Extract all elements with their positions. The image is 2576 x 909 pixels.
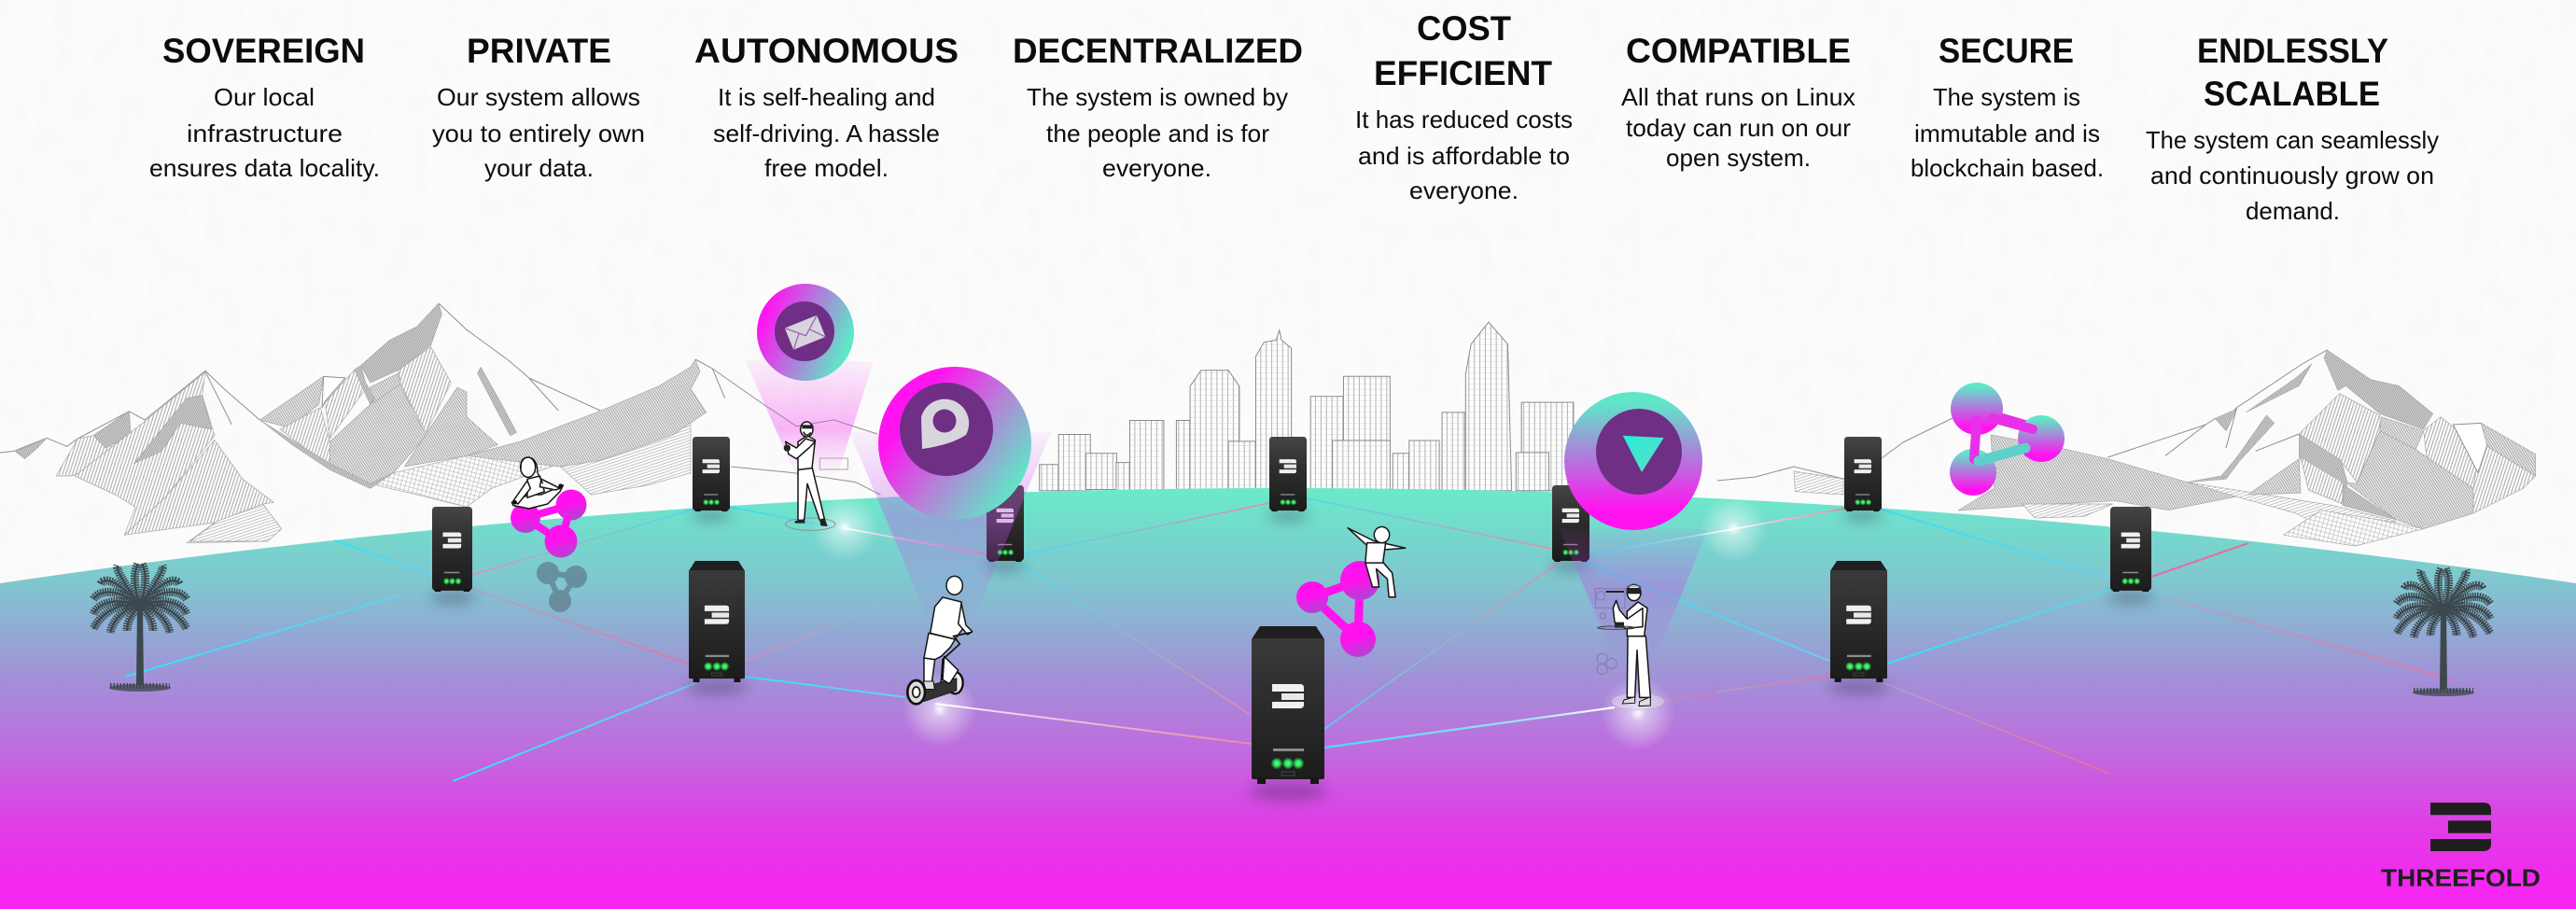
heading column: Endlessly Scalable (2146, 31, 2439, 225)
server node G (1552, 485, 1589, 562)
server shadows (430, 509, 2153, 802)
molecule shadow left (537, 562, 587, 612)
server node H (1844, 437, 1882, 511)
heading column: Compatible: COMPATIBLE (1626, 31, 1851, 70)
heading column: Endlessly Scalable: and continuously grow on (2150, 161, 2434, 189)
server node E (1269, 437, 1307, 511)
heading column: Secure: blockchain based. (1911, 154, 2104, 182)
heading column: Private: Our system allows (437, 83, 640, 111)
server node A (432, 507, 472, 592)
heading column: Secure: immutable and is (1914, 119, 2100, 147)
heading column: Decentralized: everyone. (1102, 154, 1211, 182)
callout: mail icon (757, 284, 854, 381)
heading column: Compatible: today can run on our (1626, 114, 1851, 142)
server node J (2110, 507, 2151, 592)
heading column: Compatible (1621, 31, 1855, 172)
city skyline (1040, 322, 1574, 492)
heading column: Sovereign: SOVEREIGN (162, 31, 365, 70)
heading column: Decentralized: DECENTRALIZED (1013, 31, 1303, 70)
heading column: Endlessly Scalable: demand. (2246, 197, 2340, 225)
heading column: Secure: The system is (1933, 83, 2080, 111)
heading column: Sovereign: ensures data locality. (149, 154, 380, 182)
ridge feature below the main peak (478, 367, 516, 436)
heading column: Cost Efficient: COST (1417, 8, 1511, 48)
heading column: Endlessly Scalable: SCALABLE (2204, 74, 2380, 113)
heading column: Autonomous: self-driving. A hassle (713, 119, 940, 147)
heading column: Sovereign: Our local (214, 83, 315, 111)
heading column: Cost Efficient: It has reduced costs (1355, 105, 1573, 133)
icon: palm tree right (2397, 568, 2490, 696)
heading column: Compatible: All that runs on Linux (1621, 83, 1855, 111)
person: standing with phone (784, 422, 847, 530)
heading column: Decentralized (1013, 31, 1303, 182)
heading column: Secure (1911, 31, 2104, 182)
heading column: Cost Efficient: EFFICIENT (1374, 53, 1552, 92)
heading column: Cost Efficient: and is affordable to (1358, 142, 1570, 170)
heading column: Endlessly Scalable: ENDLESSLY (2197, 31, 2388, 70)
server node B (693, 437, 730, 511)
server node I (1830, 561, 1887, 682)
callout: triangle icon (1564, 392, 1702, 530)
network connection lines (125, 498, 2451, 781)
mountains: left range (0, 303, 880, 543)
heading column: Autonomous (694, 31, 959, 182)
heading column: Autonomous: AUTONOMOUS (694, 31, 959, 70)
beam: pin callout (849, 432, 1051, 627)
person: kid on molecule (1348, 526, 1406, 597)
beam: mail callout (745, 359, 874, 476)
callout: location pin icon (878, 367, 1031, 520)
mountains: right range (1717, 350, 2536, 546)
person: standing with hologram (1595, 584, 1663, 709)
heading column: Sovereign: infrastructure (187, 119, 343, 147)
heading column: Private (432, 31, 645, 182)
logo: ThreeFold (2381, 803, 2541, 891)
person: on segway (907, 576, 973, 704)
server node F (centre, large) (1252, 626, 1324, 784)
heading column: Compatible: open system. (1666, 144, 1811, 172)
heading column: Private: you to entirely own (432, 119, 645, 147)
heading column: Autonomous: free model. (764, 154, 889, 182)
heading column: Private: PRIVATE (467, 31, 611, 70)
beam: triangle callout (1560, 529, 1708, 660)
heading column: Secure: SECURE (1939, 31, 2074, 70)
logo: ThreeFold: THREEFOLD (2381, 865, 2541, 891)
icon: palm tree left (93, 564, 187, 692)
molecule centre: magenta (1296, 561, 1379, 657)
heading column: Sovereign (149, 31, 380, 182)
molecule left: magenta (511, 489, 586, 558)
glow spots under people (811, 494, 1767, 750)
heading column: Cost Efficient (1355, 8, 1573, 204)
heading column: Autonomous: It is self-healing and (718, 83, 935, 111)
heading column: Cost Efficient: everyone. (1409, 176, 1519, 204)
ground: teal to magenta gradient dome (0, 488, 2576, 909)
heading column: Decentralized: the people and is for (1046, 119, 1269, 147)
heading column: Decentralized: The system is owned by (1027, 83, 1288, 111)
person: meditating woman (511, 457, 563, 509)
heading column: Private: your data. (484, 154, 594, 182)
server node D (987, 485, 1024, 562)
server node C (689, 561, 745, 682)
heading column: Endlessly Scalable: The system can seamlessly (2146, 126, 2439, 154)
molecule right: teal gradient (1950, 383, 2065, 496)
